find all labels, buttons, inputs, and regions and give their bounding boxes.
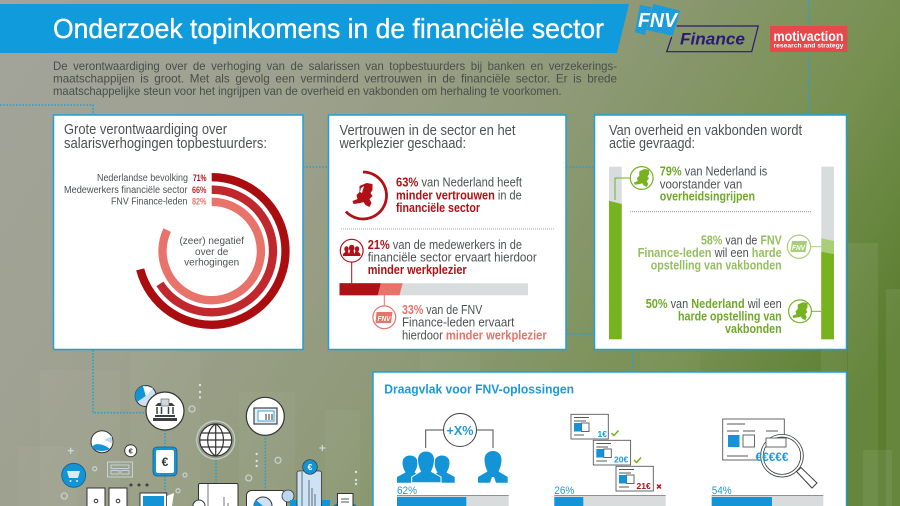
text: 50%: 50% van Nederland wil een: [646, 297, 782, 311]
icon: document: [333, 494, 357, 506]
icon: safe: [246, 397, 284, 435]
heading: [64, 121, 267, 152]
icon: people with +X%: +X%: [446, 423, 474, 438]
panel: verontwaardiging: [54, 115, 303, 350]
illustration: finance icons: [61, 384, 357, 506]
logo: Motivaction: research and strategy: [774, 44, 844, 50]
chart legend: FNV Finance-leden: [111, 196, 188, 208]
title: Onderzoek topinkomens in de financiële sector: [53, 13, 604, 44]
text: 63%: [396, 176, 522, 215]
icon: recycle: [91, 431, 113, 453]
logo: Motivaction: motivaction: [774, 28, 844, 44]
stat: 62%: 62%: [397, 485, 417, 497]
text: 50%: [646, 297, 782, 336]
heading: Vertrouwen in de sector en het: [340, 122, 516, 139]
chart legend: 66%: [192, 185, 206, 195]
icon: shopping cart: [62, 463, 86, 487]
icon: chart roll: [246, 490, 294, 506]
icon: FNV leden: [373, 295, 396, 329]
icon: report: [193, 484, 238, 506]
chart centre label: over de: [195, 247, 229, 258]
chart legend: Medewerkers financiële sector: [64, 185, 188, 196]
panel: actie gevraagd: [594, 115, 846, 350]
icon: euro tile: €: [162, 455, 169, 469]
text: 21%: 21% van de medewerkers in de: [368, 238, 522, 252]
icon: coin: €: [129, 447, 134, 456]
text: 63%: 63% van Nederland heeft: [396, 176, 522, 190]
text: 21%: financiële sector ervaart hierdoor: [368, 251, 537, 265]
logo: Motivaction: [770, 26, 847, 52]
icon: laptop: [140, 493, 174, 506]
header banner: [0, 4, 629, 53]
chart legend: 82%: [192, 196, 206, 206]
heading: Draagvlak voor FNV-oplossingen: [384, 381, 574, 396]
intro text: maatschappelijke steun voor het ingrijpen van de overheid en vakbonden om herhaling te voorkomen.: [53, 84, 562, 98]
icon: Netherlands 79%: [615, 167, 653, 200]
heading: actie gevraagd:: [609, 135, 695, 152]
text: 79%: voorstander van: [660, 177, 742, 191]
icon: salary cards: 21€: [636, 481, 651, 491]
text: 79%: 79% van Nederland is: [660, 164, 767, 178]
radial bar chart: [140, 177, 285, 325]
text: 58%: 58% van de FNV: [701, 233, 782, 247]
text: 58%: Finance-leden wil een harde: [638, 246, 782, 260]
chart centre label: verhogingen: [184, 258, 239, 268]
intro text: [53, 59, 617, 98]
icon: medewerkers: [340, 239, 363, 284]
heading: salarisverhogingen topbestuurders:: [64, 135, 267, 152]
text: 21%: [368, 238, 537, 277]
bar: 58% and 50%: [821, 167, 834, 339]
text: 33%: [402, 303, 547, 342]
icon: salary cards: 20€: [614, 455, 628, 465]
chart legend: [64, 173, 206, 208]
icon: pie chart: [135, 385, 156, 406]
stat: 62%: [397, 485, 509, 506]
text: 33%: 33% van de FNV: [402, 303, 483, 317]
heading: [339, 122, 516, 152]
text: 33%: Finance-leden ervaart: [402, 316, 515, 330]
intro text: maatschappijen is groot. Met als gevolg een verminderd vertrouwen in de financiële sector. Er is brede: [53, 72, 617, 86]
panel: vertrouwen en werkplezier: [328, 115, 566, 350]
stat: 26%: 26%: [554, 485, 574, 497]
icon: people with +X%: [397, 414, 508, 483]
decoration: rings and dots: [61, 384, 357, 499]
icon: globe: [197, 421, 235, 459]
icon: FNV 58%: FNV: [792, 245, 806, 252]
intro text: De verontwaardiging over de verhoging van de salarissen van topbestuurders bij banken en verzekerings-: [53, 59, 617, 73]
icon: office building: €: [308, 462, 313, 472]
logo: FNV Finance: FNV: [638, 10, 679, 32]
icon: bank: [146, 392, 184, 430]
chart centre label: (zeer) negatief: [179, 236, 244, 247]
icon: salary cards: 1€: [598, 429, 607, 439]
icon: FNV 58%: [787, 235, 821, 258]
icon: coin: [125, 445, 137, 457]
text: 33%: hierdoor minder werkplezier: [402, 328, 547, 342]
heading: Grote verontwaardiging over: [64, 121, 227, 138]
stat: 54%: 54%: [712, 485, 732, 497]
icon: 63% ring with Netherlands: [346, 172, 387, 219]
icon: salary cards: [571, 414, 661, 491]
icon: banknote: [108, 462, 132, 477]
bar: werkplezier: [340, 283, 528, 295]
text: 21%: minder werkplezier: [368, 263, 467, 277]
icon: documents: [87, 488, 127, 506]
heading: Van overheid en vakbonden wordt: [609, 122, 803, 139]
text: 58%: [638, 233, 782, 273]
chart legend: 71%: [193, 173, 206, 183]
chart centre label: [179, 236, 244, 268]
text: 63%: financiële sector: [396, 201, 480, 215]
text: 79%: overheidsingrijpen: [660, 190, 755, 204]
panel: draagvlak: [373, 372, 846, 506]
text: 50%: harde opstelling van: [678, 310, 782, 324]
icon: document with magnifier: €€€€€: [756, 450, 789, 464]
logo: FNV Finance: Finance: [680, 30, 745, 48]
logo: FNV Finance: [635, 4, 758, 52]
icon: FNV leden: FNV: [378, 316, 392, 323]
stat: 54%: [712, 485, 823, 506]
icon: euro tile: [153, 447, 177, 476]
stat: 26%: [554, 485, 666, 506]
heading: [609, 122, 803, 152]
chart legend: Nederlandse bevolking: [97, 173, 188, 184]
icon: document with magnifier: [723, 419, 817, 488]
text: 79%: [660, 164, 767, 204]
heading: werkplezier geschaad:: [339, 135, 466, 152]
bar: 79%: [609, 167, 622, 339]
text: 63%: minder vertrouwen in de: [396, 188, 522, 202]
icon: Netherlands 50%: [789, 300, 821, 323]
text: 50%: vakbonden: [725, 322, 782, 336]
icon: office building: [290, 460, 330, 506]
text: 58%: opstelling van vakbonden: [651, 259, 782, 273]
